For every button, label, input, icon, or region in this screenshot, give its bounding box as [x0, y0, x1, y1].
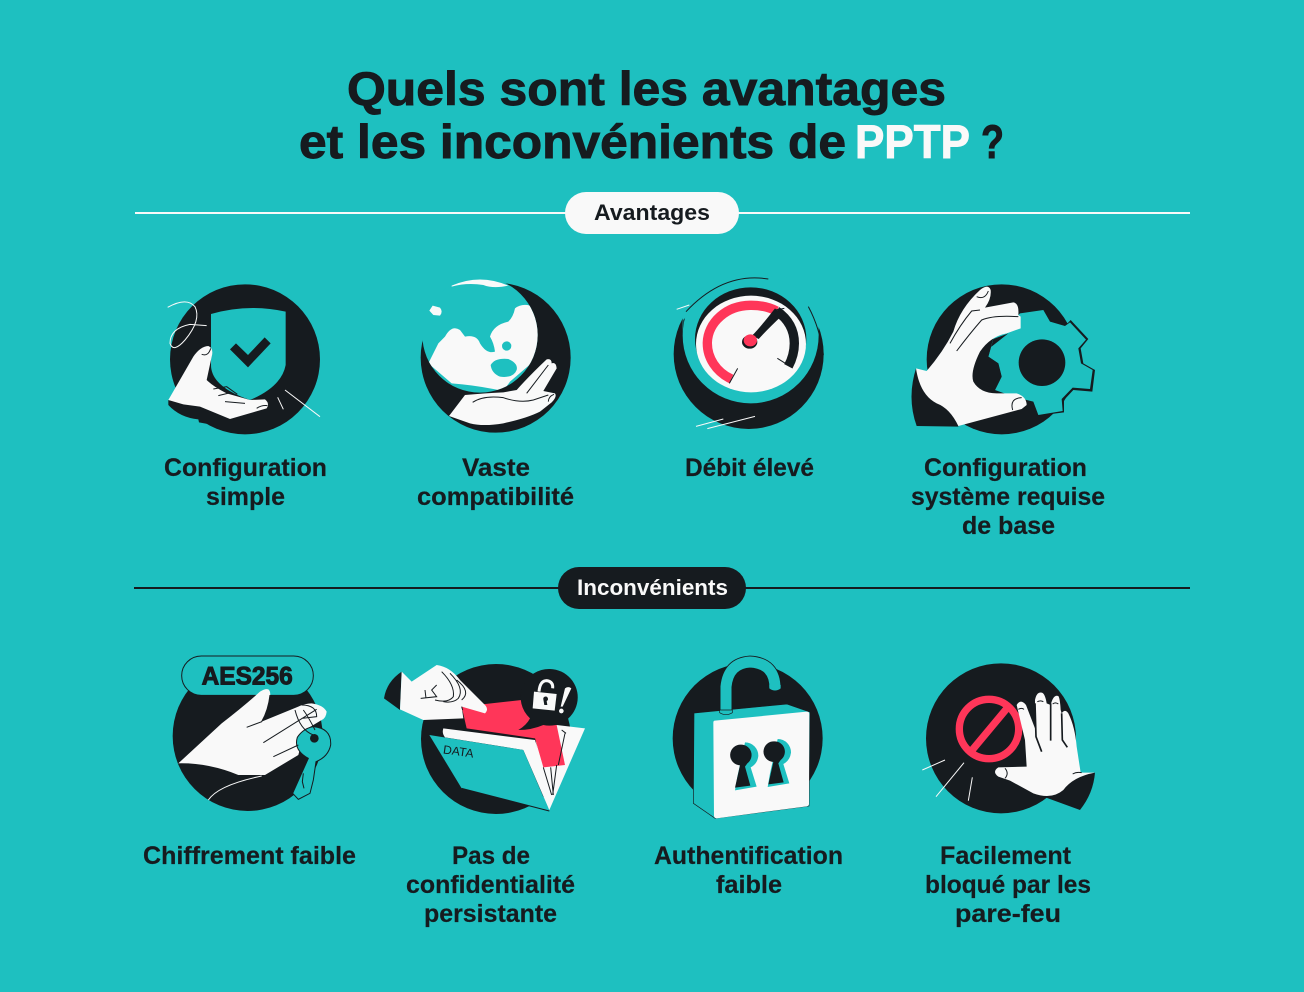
section divider: Inconvénients: Inconvénients	[577, 575, 728, 600]
label: Facilement bloqué par les pare-feu: Facilement	[940, 842, 1072, 870]
icon: padlock with two keyholes	[673, 662, 823, 818]
label: Configuration système requise de base	[911, 454, 1105, 540]
icon: hand holding gear	[911, 284, 1095, 434]
icon: folder with stolen data: DATA	[442, 742, 475, 761]
title: ?	[981, 115, 1004, 168]
title: PPTP	[855, 115, 970, 168]
section divider: Avantages	[135, 192, 1190, 234]
icon: hand blocking with prohibited sign	[922, 663, 1095, 813]
label: Authentification faible: Authentification	[654, 842, 843, 870]
label: Vaste compatibilité: Vaste	[462, 454, 530, 482]
label: Pas de confidentialité persistante	[406, 842, 575, 928]
icon: speedometer	[674, 267, 824, 429]
icon: shield in hand	[168, 284, 320, 434]
label: Configuration système requise de base: de base	[962, 512, 1055, 540]
label: Authentification faible	[654, 842, 843, 899]
label: Authentification faible: faible	[716, 871, 782, 899]
label: Vaste compatibilité	[417, 454, 574, 511]
section divider: Avantages: Avantages	[594, 200, 710, 225]
title: et les inconvénients de	[299, 115, 846, 168]
label: Configuration simple	[164, 454, 327, 511]
section divider: Inconvénients	[134, 567, 1190, 609]
icon: globe in hand	[421, 277, 571, 433]
label: Configuration système requise de base: Configuration	[924, 454, 1087, 482]
label: Configuration simple: simple	[206, 483, 285, 511]
label: Pas de confidentialité persistante: Pas de	[452, 842, 530, 870]
label: Chiffrement faible: Chiffrement faible	[143, 842, 356, 870]
label: Pas de confidentialité persistante: confidentialité	[406, 871, 575, 899]
label: Vaste compatibilité: compatibilité	[417, 483, 574, 511]
label: Configuration simple: Configuration	[164, 454, 327, 482]
icon: folder with stolen data	[384, 664, 585, 814]
label: Débit élevé: Débit élevé	[685, 454, 814, 482]
label: Configuration système requise de base: système requise	[911, 483, 1105, 511]
title	[299, 62, 1004, 168]
icon: key and AES256 badge: AES256	[202, 663, 293, 691]
label: Facilement bloqué par les pare-feu: pare-feu	[955, 900, 1061, 928]
label: Pas de confidentialité persistante: persistante	[424, 900, 557, 928]
title: Quels sont les avantages	[347, 62, 946, 115]
label: Facilement bloqué par les pare-feu	[925, 842, 1091, 928]
label: Facilement bloqué par les pare-feu: bloqué par les	[925, 871, 1091, 899]
icon: key and AES256 badge	[173, 656, 331, 811]
